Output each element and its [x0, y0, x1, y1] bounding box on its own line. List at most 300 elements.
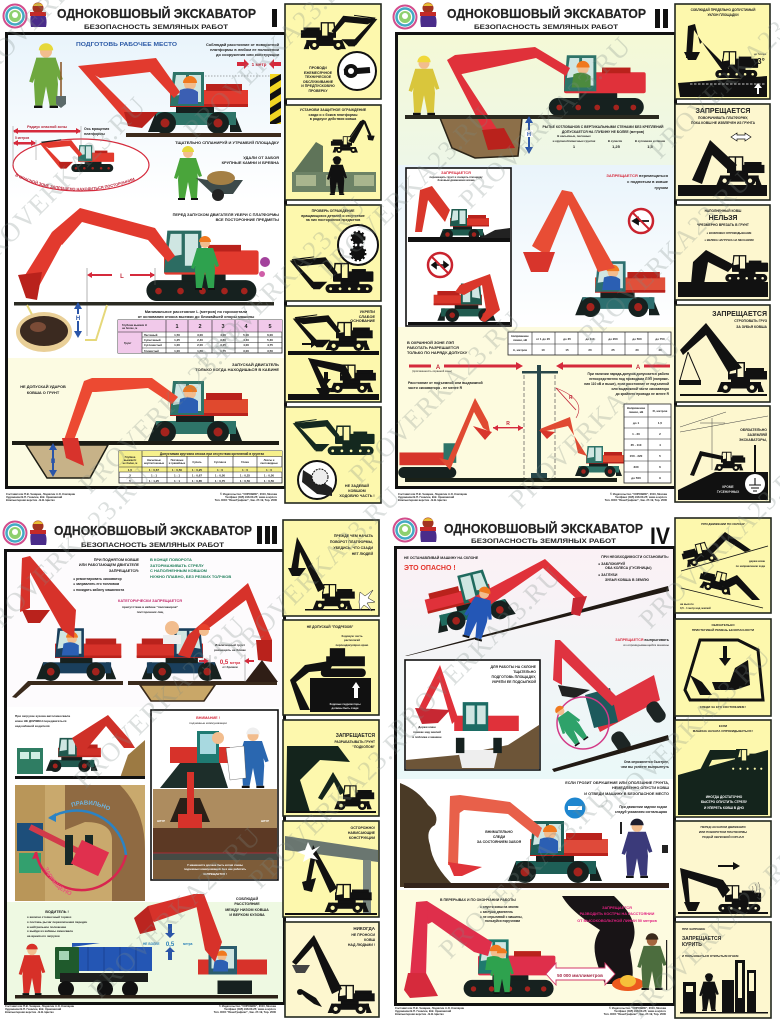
text: no passengers: КАТЕГОРИЧЕСКИ ЗАПРЕЩАЕТСЯ [118, 599, 182, 603]
box: prepare the site on slope: и поближе к машине [412, 735, 442, 739]
striped barrier [270, 74, 281, 124]
poster II [394, 2, 770, 502]
text: watch face [477, 830, 522, 844]
side panel: fencing: УСТАНОВИ ЗАЩИТНОЕ ОГРАЖДЕНИЕ [300, 108, 367, 112]
table: slope steepness: 1 : 1 [174, 479, 180, 483]
header IV [394, 518, 670, 550]
side panel: never over people: НЕ ПРОНОСИ [351, 933, 375, 937]
A dimension arrows [409, 362, 670, 373]
side panel: fencing [285, 105, 381, 200]
dimension: not more than half metre [143, 924, 193, 960]
excavator: parked tracked [404, 901, 555, 998]
slope [405, 586, 669, 656]
text: under-line permit: до крайнего провода не менее R [616, 392, 670, 396]
side panel: no slewing in ground: ЗАПРЕЩАЕТСЯ [696, 108, 750, 115]
A dimension arrows: А [436, 365, 441, 371]
text: no travel with loaded bucket [606, 173, 669, 190]
side panel: no undermining: РАЗРАБАТЫВАТЬ ГРУНТ [334, 740, 375, 744]
text: vertical walls: В супесях [608, 139, 623, 143]
side panel: no smoking when refuelling: ЗАПРЕЩАЕТСЯ [682, 936, 722, 942]
table: R distance: 330 [633, 465, 639, 469]
text: breaks: В ПЕРЕРЫВАХ И ПО ОКОНЧАНИИ РАБОТЫ [440, 898, 516, 902]
text: under-line permit [584, 372, 670, 396]
excavator: tracked left of pole: R [506, 421, 510, 427]
table: A distance by voltage: от 1 до 20 [536, 337, 550, 341]
text: reversing: следуй указаниям сигнальщика [615, 810, 667, 814]
table: R distance: Напряжение [627, 406, 645, 410]
table: minimum distance: 2,00 [197, 343, 203, 347]
table: R distance: 6 [659, 465, 661, 469]
table: slope steepness: выемки Н [124, 458, 136, 462]
side panel: no slinging to teeth: ЗАПРЕЩАЕТСЯ [712, 311, 767, 318]
danger zone diagram: 5 метров [15, 136, 29, 140]
side panel: if overturning: ЕСЛИ [719, 724, 727, 728]
side panel: never over people [285, 922, 379, 1017]
side panel: grounding: ГУСЕНИЧНЫХ [717, 490, 740, 494]
text: clearance note: Соблюдай расстояние от поворотной [206, 42, 280, 47]
text: clearance note: до сооружения или конструкции [216, 52, 280, 57]
side panel: max slope: УКЛОН ПЛОЩАДКИ [707, 13, 739, 17]
pit [440, 118, 522, 158]
text: driver instructions [27, 910, 87, 938]
side panel: no undercut: Ходовые гидромоторы [329, 702, 361, 706]
dimension: half metre: Извлеченный грунт [215, 643, 246, 647]
watermark overlay: PROVERKA23.RU [453, 31, 637, 214]
table: R distance: 5 [659, 454, 661, 458]
table: minimum distance: 1,50 [197, 349, 203, 353]
footer credits IV: Тип. ООО "ИнноГрафикс", Зак. 27-19, Тир. 2000 [604, 1012, 666, 1016]
text: start engine in cab [195, 362, 279, 372]
text: start engine in cab: ЗАПУСКАЙ ДВИГАТЕЛЬ [232, 362, 279, 367]
text: smooth braking [150, 557, 231, 579]
box: prepare the site on slope: пониже над землей [413, 730, 441, 734]
L dimension: L [120, 274, 124, 280]
box: underground utilities: ЗАПРЕЩАЕТСЯ ! [203, 872, 227, 876]
dimension: half metre [199, 643, 254, 682]
table: minimum distance: 4,75 [267, 343, 273, 347]
side panel: look behind: НЕТ ЛЮДЕЙ [352, 552, 373, 556]
text: truck loading: При загрузке кузова автосамосвала [15, 714, 70, 718]
table: minimum distance: 1,75 [220, 349, 226, 353]
figure: pirate signaller [620, 819, 668, 878]
text: smooth braking: НУЖНО ПЛАВНО, БЕЗ РЕЗКИХ ТОЛЧКОВ [150, 574, 231, 579]
side panel: no slewing in ground: ПОКА КОВШ НЕ ИЗВЛЕЧЕН ИЗ ГРУНТА [691, 121, 756, 125]
footer credits I: Тел/факс (495) 918-60-25; www.sovpk.ru [225, 495, 277, 499]
table: slope steepness: Супесь [192, 460, 202, 464]
text: minimum distance heading [138, 309, 255, 319]
H arrow: H [527, 132, 531, 138]
table: minimum distance: 3,60 [220, 338, 226, 342]
text: overturn warning: чем вы успеете выпрыгнуть [621, 765, 669, 769]
table: slope steepness: 1 : 0,50 [264, 479, 274, 483]
truck: dump truck [55, 943, 152, 997]
side panel: never over people: НИКОГДА [353, 926, 376, 931]
table: minimum distance: Глинистый [144, 349, 159, 353]
arrow: 50 000 mm: 50 000 миллиметров [557, 973, 603, 978]
text: landslide [565, 781, 669, 796]
text: vertical walls: 1,5 [647, 144, 654, 149]
watermark overlay: PROVERKA23.RU [313, 101, 497, 284]
side panel: grounding: ЭКСКАВАТОРЫ, [739, 438, 767, 442]
side panel: horn signal: ПЕРЕД НАЧАЛОМ ДВИЖЕНИЯ [701, 825, 745, 829]
table: R distance: 9 [659, 476, 661, 480]
poster I [2, 2, 382, 504]
table: R distance: линии, кВ [629, 410, 644, 414]
side panel: maintenance: ПРОВЕРКУ [308, 89, 328, 93]
danger zone diagram: В ОПАСНОЙ ЗОНЕ ЗАПРЕЩЕНО НАХОДИТЬСЯ ПОСТОРОННИМ [15, 174, 135, 191]
circle: jumping operator [548, 697, 609, 749]
side panel: overfilled bucket: НЕЛЬЗЯ [709, 215, 737, 222]
side panel: slope travel: ПРИ ДВИЖЕНИИ ПО СКЛОНУ [701, 522, 745, 526]
table: slope steepness: и гравийные [169, 461, 186, 465]
text: remove boulders [222, 155, 279, 165]
side panel: look behind [283, 520, 379, 616]
table: R distance [624, 404, 671, 483]
table: R distance: до 1 [633, 421, 639, 425]
text: overturn warning [621, 760, 669, 769]
table: R distance: 1 - 20 [632, 432, 640, 436]
main frame IV [396, 548, 674, 1004]
side panel: max slope: не более [754, 52, 767, 56]
text: keep clearance: РАССТОЯНИЕ [234, 902, 260, 906]
text: no passengers: посторонних лиц [137, 610, 163, 614]
side panel: slope travel [675, 518, 771, 613]
side panel: no undercut: располагай [344, 638, 360, 642]
side panel: weak ground: ОСНОВАНИЕ [350, 319, 375, 323]
table: slope steepness: 1 : 0,50 [264, 474, 274, 478]
side panel: no smoking when refuelling: ПРИ ЗАПРАВКЕ [682, 927, 705, 931]
header III [4, 520, 277, 549]
icon: one-way blue sign [564, 798, 586, 818]
side panel: undercarriage [285, 407, 381, 503]
footer credits II: Художники В.П. Газалин, В.В. Храмовский [398, 495, 455, 499]
text: driver instructions: ВОДИТЕЛЬ ! [45, 910, 69, 914]
table: slope steepness: Насыпные [147, 458, 161, 462]
side panel: no slinging to teeth [675, 305, 770, 402]
table: minimum distance [118, 320, 282, 353]
text: LEP permit: ТОЛЬКО ПО НАРЯДУ-ДОПУСКУ [407, 350, 468, 355]
box: prepare the site on slope: ТЩАТЕЛЬНО [513, 670, 536, 674]
table: A distance by voltage: 20 [588, 348, 592, 352]
footer credits I: Компьютерная верстка - В.В. Цветко [6, 498, 55, 502]
table: minimum distance: 6,00 [267, 333, 273, 337]
table: minimum distance: 3 [221, 324, 225, 330]
side panel: if overturning: И УПЕРЕТЬ КОВШ В ДНО [704, 806, 745, 810]
diagram: right and wrong slew: ЗАПРЕЩЕНО [44, 867, 72, 895]
excavator: retreating from face [448, 795, 608, 883]
side panel: undercarriage: НЕ ЗАДЕВАЙ [345, 484, 369, 488]
table: minimum distance: Глубина выемки Н [122, 323, 147, 327]
side panel: slope travel: 0,5 - 1 метр над землей [680, 606, 711, 610]
table: A distance by voltage: Напряжение [511, 334, 529, 338]
text: start engine in cab: ТОЛЬКО КОГДА НАХОДИШЬСЯ В КАБИНЕ [195, 367, 279, 372]
text: if stopping: ● ЗАГЛУБИ [598, 573, 618, 577]
table: A distance by voltage: 10 [541, 348, 545, 352]
side panel: no smoking when refuelling: И ПОЛЬЗОВАТЬСЯ ОТКРЫТЫМ ОГНЕМ [682, 954, 739, 958]
table: A distance by voltage: 25 [611, 348, 615, 352]
pit and spoil [128, 660, 278, 701]
main frame II [396, 34, 676, 488]
table: slope steepness: 1 : 0,75 [215, 479, 225, 483]
table: slope steepness: 1 : 1 [151, 474, 157, 478]
text: remove boulders: КРУПНЫЕ КАМНИ И БРЕВНА [222, 160, 279, 165]
side panel: slope travel: по направлению хода [736, 565, 765, 568]
side panel: fence check: ПРОВЕРЬ ОГРАЖДЕНИЕ [312, 209, 355, 213]
diagram: right and wrong slew: ПРАВИЛЬНО [71, 800, 110, 810]
box: no ground dragging: боковым движением ковша [437, 178, 475, 182]
text: do not stop on slope: ЭТО ОПАСНО ! [404, 565, 456, 572]
side panel: grounding: ОБЯЗАТЕЛЬНО [740, 428, 767, 432]
table: slope steepness: 1 : 0,50 [172, 468, 182, 472]
footer credits III: Составители П.В. Чекарев, Лодикгин А.О. Клепарин [5, 1004, 75, 1008]
side panel: fencing: сзади и с боков платформы [308, 113, 358, 117]
side panel: no undermining: "ПОДКОПОМ" [352, 745, 375, 749]
ground slab [12, 681, 123, 698]
one metre dimension [205, 59, 281, 76]
text: no bucket strikes: КОВША О ГРУНТ [27, 390, 60, 395]
header II: БЕЗОПАСНОСТЬ ЗЕМЛЯНЫХ РАБОТ [474, 24, 618, 31]
table: slope steepness: неуплотненные [144, 462, 165, 465]
side panel: seat belt [675, 619, 771, 716]
side panel: undercarriage: ХОДОВУЮ ЧАСТЬ ! [339, 494, 375, 498]
side panel: look behind: ПОВОРОТ ПЛАТФОРМЫ, [330, 540, 373, 544]
lower slope [552, 735, 669, 772]
text: remove boulders: УДАЛИ ОТ ЗАБОЯ [243, 155, 279, 160]
text: vertical walls: и крупнообломочных грунтах [553, 139, 596, 143]
side panel: max slope [675, 4, 770, 99]
text: under-line permit: или выдвижной части экскаватора [612, 387, 669, 391]
side panel: grounding [675, 406, 770, 502]
text: reversing [615, 805, 668, 814]
side panel: fence check: вращающихся деталей и отсутствие [301, 214, 365, 218]
side panel: no undercut: Ходовую часть [341, 634, 363, 638]
H pit depth: H [51, 459, 55, 465]
text: watch face: ВНИМАТЕЛЬНО [485, 830, 513, 834]
text: minimum distance heading: Минимальное расстояние L (метров) по горизонтали [145, 309, 248, 314]
ground line [405, 478, 617, 482]
side panel: overfilled bucket: ЧРЕЗМЕРНО ВРЕЗАТЬ В ГРУНТ [697, 223, 749, 227]
H pit depth [49, 443, 57, 477]
table: slope steepness: 1 : 0,25 [192, 468, 202, 472]
text: no fires: ОТ ВЫСОКОВОЛЬТНОЙ ЛИНИИ 50 метров [577, 919, 657, 923]
side panel: slope travel: держи ковш [749, 560, 766, 563]
table: minimum distance: Супесчаный [144, 338, 161, 342]
footer credits IV: Художники В.П. Газалин, В.В. Храмовский [395, 1009, 452, 1013]
text: prohibited at raised bucket: ПРИ ПОДНЯТОМ КОВШЕ [94, 558, 140, 562]
text: no bucket strikes: НЕ ДОПУСКАЙ УДАРОВ [20, 384, 66, 389]
text: clearance note: платформы в любом ее положении [210, 47, 280, 52]
table: A distance by voltage: до 35 [563, 337, 571, 341]
side panel: horn signal: ИЛИ ПОВОРОТОМ ПЛАТФОРМЫ [699, 830, 747, 834]
side panel: no slewing in ground [675, 104, 770, 200]
footer credits II [398, 492, 667, 502]
text: vertical walls: 1,25 [612, 144, 621, 149]
footer credits IV: Компьютерная верстка - В.В. Цветко [395, 1012, 444, 1016]
text: smooth braking: С НАПОЛНЕННЫМ КОВШОМ [150, 568, 208, 573]
table: slope steepness: Песчаные [171, 458, 184, 462]
side panel: no smoking when refuelling: КУРИТЬ [682, 942, 702, 948]
header I [4, 2, 277, 31]
text: truck loading: над кабиной водителя [15, 724, 50, 728]
table: slope steepness: 1 : 0,67 [192, 474, 202, 478]
table: minimum distance: Песчаный [144, 333, 158, 337]
dimension: half metre: 0,5 метра [220, 660, 240, 666]
side panel: if overturning: БЫСТРО ОПУСТИТЬ СТРЕЛУ [701, 800, 748, 804]
footer credits II: Тел/факс (495) 918-60-25; www.sovpk.ru [615, 495, 667, 499]
table: minimum distance: 3,25 [220, 343, 226, 347]
text: no bucket strikes [20, 384, 66, 395]
text: do not stop on slope [404, 556, 479, 572]
side panel: weak ground: СЛАБОЕ [359, 315, 375, 319]
side panel: no undermining [283, 720, 379, 816]
table: R distance: 4 [659, 443, 661, 447]
text: if stopping: ПРИ НЕОБХОДИМОСТИ ОСТАНОВИТЬ: [601, 555, 669, 559]
text: prohibited at raised bucket: ЗАПРЕЩАЕТСЯ: [109, 569, 139, 573]
watermark overlay: PROVERKA23.RU [73, 316, 257, 499]
text: landslide: ЕСЛИ ГРОЗИТ ОБРУШЕНИЕ ИЛИ ОПОЛЗАНИЕ ГРУНТА, [565, 781, 669, 785]
text: driver instructions: ● включи стояночный тормоз [27, 915, 72, 919]
box: prepare the site on slope: Держи ковш [418, 725, 436, 729]
side panel: maintenance: ОБСЛУЖИВАНИЕ [303, 80, 334, 84]
text: LEP permit [407, 340, 468, 355]
side panel: never over people: НАД ЛЮДЬМИ ! [348, 943, 375, 947]
table: slope steepness: 1 : 0,25 [240, 474, 250, 478]
text: no travel with loaded bucket: грузом [655, 185, 668, 190]
text: before starting engine: ПЕРЕД ЗАПУСКОМ ДВИГАТЕЛЯ УБЕРИ С ПЛАТФОРМЫ [173, 212, 279, 217]
side panel: maintenance: И ПРЕДПУСКОВУЮ [301, 84, 335, 88]
side panel: no undercut: должны быть сзади [332, 706, 359, 710]
table: minimum distance: 3,00 [243, 349, 249, 353]
footer credits III: Тел/факс (495) 918-60-25; www.sovpk.ru [224, 1007, 276, 1011]
text: before starting engine [173, 212, 279, 222]
main frame I [6, 34, 286, 488]
side panel: no smoking when refuelling [675, 922, 771, 1018]
side panel: maintenance: ЕЖЕМЕСЯЧНОЕ [304, 71, 333, 75]
text: no fires [577, 906, 657, 923]
figure: banksman in yellow [409, 56, 439, 115]
table: A distance by voltage: А, метров [513, 348, 527, 352]
side panel: no undercut: НЕ ДОПУСКАЙ "ПОДРЕЗОВ" [307, 625, 354, 629]
side panel: no slewing in ground: ПОВОРАЧИВАТЬ ПЛАТФОРМУ, [698, 116, 748, 120]
text: level site: ТЩАТЕЛЬНО СПЛАНИРУЙ И УТРАМБУЙ ПЛОЩАДКУ [175, 140, 280, 145]
box: underground utilities: подземных коммуникаций. Без нее работать [184, 867, 246, 871]
footer credits III: Художники В.П. Газалин, В.В. Храмовский [5, 1007, 62, 1011]
side panel: undercarriage: КОВШОМ [348, 489, 366, 493]
text: minimum distance heading: от основания откоса выемки до ближайшей опоры машины [138, 314, 255, 319]
text: driver instructions: в нейтральное положение [27, 925, 67, 929]
footer credits II: Компьютерная верстка - В.В. Цветко [398, 498, 447, 502]
side panel: maintenance: ПРОВОДИ [309, 66, 327, 70]
table: slope steepness: Суглинок [214, 460, 227, 464]
header III: БЕЗОПАСНОСТЬ ЗЕМЛЯНЫХ РАБОТ [81, 542, 224, 549]
text: no fires: РАЗВОДИТЬ КОСТРЫ НА РАССТОЯНИИ [580, 912, 655, 916]
excavator: on slope [421, 559, 587, 643]
text: driver instructions: ● поставь рычаг переключения передач [27, 920, 87, 924]
table: minimum distance: Грунт [124, 341, 132, 345]
side panel: overhead structures: ОСТОРОЖНО! [351, 826, 375, 830]
text: prohibited at raised bucket [73, 558, 140, 592]
footer credits II: Тип. ООО "ИнноГрафикс", Зак. 27-19, Тир. 2000 [605, 498, 667, 502]
footer credits I: Тип. ООО "ИнноГрафикс", Зак. 27-19, Тир. 2000 [215, 498, 277, 502]
table: A distance by voltage: 15 [565, 348, 569, 352]
side panel: overhead structures: КОНСТРУКЦИИ [349, 836, 375, 840]
text: no fires: ЗАПРЕЩАЕТСЯ [602, 906, 632, 910]
table: R distance: 1,5 [658, 421, 662, 425]
side panel: seat belt: СЛЕДИ ЗА ЕГО СОСТОЯНИЕМ ! [700, 705, 746, 709]
table: R distance: 2 [659, 432, 661, 436]
side panel: maintenance [285, 4, 381, 99]
text: driver instructions: на время его загрузки [27, 934, 60, 938]
text: breaks: пользуйся поручнями [485, 919, 520, 923]
text: vertical walls [543, 125, 666, 149]
danger zone diagram: Радиус опасной зоны [27, 125, 67, 129]
table: slope steepness: 1 : 1 [174, 474, 180, 478]
footer credits IV: Составители П.В. Чекарев, Лодикгин А.О. Клепарин [395, 1006, 465, 1010]
side panel: max slope: СОБЛЮДАЙ ПРЕДЕЛЬНО ДОПУСТИМЫЙ [691, 8, 756, 12]
ground line [15, 995, 278, 998]
text: breaks [440, 898, 523, 923]
side panel: if overturning [675, 720, 771, 817]
figure: spear holder [637, 933, 667, 990]
table: minimum distance: 4,40 [243, 338, 249, 342]
table: A distance by voltage: 30 [635, 348, 639, 352]
text: breaks: ● опусти ковш на землю [480, 905, 519, 909]
footer credits II: © Издательство "СОПОВИК", 2010, Москва [610, 492, 667, 496]
ground with trench and boulder [14, 302, 274, 352]
side panel: fence check: на них посторонних предметов [306, 218, 361, 222]
watermark overlay: PROVERKA23.RU [188, 191, 372, 374]
watermark overlay: PROVERKA23.RU [83, 821, 267, 1004]
text: if stopping [598, 555, 669, 582]
side panel: seat belt: ОБЯЗАТЕЛЬНО [711, 623, 735, 627]
side panel: horn signal [675, 821, 771, 917]
dimension: not more than half metre: НЕ БОЛЕЕ [143, 942, 160, 946]
danger zone diagram: Ось вращения [84, 127, 109, 131]
table: minimum distance: 1,00 [174, 343, 180, 347]
text: distance from lifting part [408, 381, 483, 390]
power pole [522, 365, 558, 478]
table: slope steepness: 1 : 0,67 [149, 468, 159, 472]
watermark overlay: PROVERKA23.RU [223, 481, 407, 664]
footer credits I [6, 492, 277, 502]
table: R distance: R, метров [653, 409, 667, 413]
side panel: overhead structures: НАВИСАЮЩИЕ [348, 831, 376, 835]
text: before starting engine: ВСЕ ПОСТОРОННИЕ ПРЕДМЕТЫ [216, 217, 279, 222]
dimension: half metre: от бровки [222, 665, 238, 669]
table: A distance by voltage: до 200 [608, 337, 618, 341]
text: no travel with loaded bucket: ЗАПРЕЩАЕТСЯ перемещаться [606, 173, 669, 178]
box: underground utilities: ШТУР [157, 819, 165, 823]
side panel: overfilled bucket: НАПОЛНЕННЫЙ КОВШ [705, 209, 741, 213]
text: vertical walls: 1 [573, 144, 576, 149]
box: underground utilities: ВНИМАНИЕ ! [196, 716, 220, 720]
table: minimum distance: 1,25 [174, 338, 180, 342]
text: prohibited at raised bucket: ИЛИ РАБОТАЮЩЕМ ДВИГАТЕЛЕ [79, 563, 140, 567]
side panel: no undermining: ЗАПРЕЩАЕТСЯ [336, 733, 375, 739]
side panel: fencing: в радиусе действия ковша [310, 117, 356, 121]
text: driver instructions: ● выйди из кабины самосвала [27, 929, 73, 933]
side panel: seat belt: ПРИСТЕГИВАЙ РЕМЕНЬ БЕЗОПАСНОСТИ [692, 628, 754, 632]
header IV: IV [650, 523, 670, 550]
dimension: half metre: размещать не ближе [214, 648, 246, 652]
text: if stopping: ЗУБЬЯ КОВША В ЗЕМЛЮ [605, 578, 649, 582]
A dimension arrows: (протяженность охранной зоны) [412, 369, 452, 373]
table: minimum distance: 2 [198, 324, 202, 330]
text: vertical walls: РЫТЬЕ КОТЛОВАНОВ С ВЕРТИКАЛЬНЫМИ СТЕНАМИ БЕЗ КРЕПЛЕНИЙ [543, 125, 664, 129]
footer credits II: Составители П.В. Чекарев, Лодикгин А.О. Клепарин [398, 492, 468, 496]
footer credits IV: Тел/факс (495) 918-60-25; www.sovpk.ru [614, 1009, 666, 1013]
side panel: maintenance: ТЕХНИЧЕСКОЕ [305, 75, 332, 79]
